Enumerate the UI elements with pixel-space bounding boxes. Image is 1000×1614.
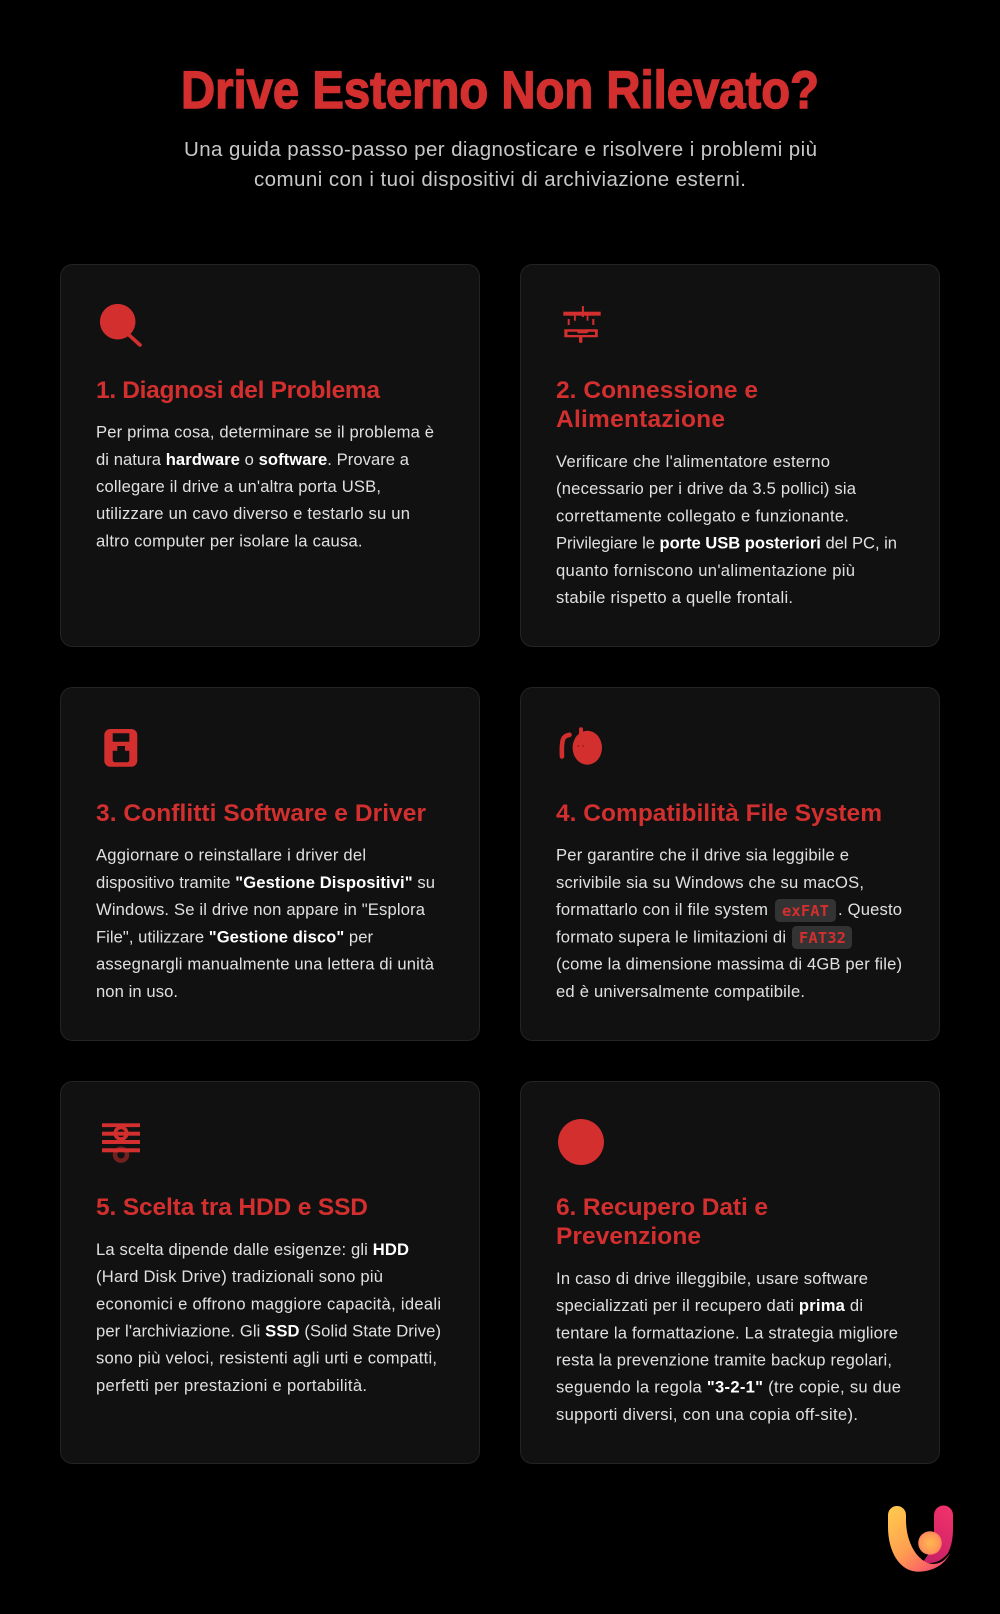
logo [888,1506,953,1572]
text: card 5: per l'archiviazione. Gli SSD (Solid State Drive) [96,1322,441,1341]
text: card 6: tentare la formattazione. La strategia migliore [556,1323,898,1342]
heading: card 5: 5. Scelta tra HDD e SSD [96,1194,368,1221]
icon: solid circle [558,1119,604,1165]
heading: card 2 [556,377,758,433]
code: FAT32 [792,926,852,949]
heading: card 3: 3. Conflitti Software e Driver [96,800,426,827]
text: card 2: (necessario per i drive da 3.5 pollici) sia [556,479,857,498]
text: card 1: Per prima cosa, determinare se il problema è [96,423,434,442]
heading: card 1: 1. Diagnosi del Problema [96,377,380,404]
text: card 4: Per garantire che il drive sia leggibile e [556,846,849,865]
text: card 2 [556,452,897,607]
text: card 3: File", utilizzare "Gestione disco" per [96,927,373,946]
icon: apple and windows blob [562,727,602,765]
text: card 6 [556,1269,901,1424]
text: card 3: Windows. Se il drive non appare in "Esplora [96,900,426,919]
icon: drive stack [102,1123,140,1161]
panel: 3. conflitti software e driver [60,688,480,1040]
text: card 5 [96,1240,441,1395]
heading: card 4: 4. Compatibilità File System [556,800,882,827]
text: card 1: di natura hardware o software. Provare a [96,450,410,469]
panel: 5. scelta tra hdd e ssd [60,1082,480,1464]
panel: 6. recupero dati e prevenzione [520,1082,940,1464]
text: card 1: collegare il drive a un'altra porta USB, [96,477,381,496]
text: card 5: La scelta dipende dalle esigenze: gli HDD [96,1240,409,1259]
text: card 6: specializzati per il recupero dati prima di [556,1296,863,1315]
code: exFAT [775,899,836,922]
code: FAT32: FAT32 [799,929,846,947]
text: card 3: non in uso. [96,982,178,1001]
icon: magnifying glass [100,304,140,345]
text: card 2: quanto forniscono un'alimentazione più [556,561,855,580]
title: Drive Esterno Non Rilevato? [181,61,819,120]
text: card 6: supporti diversi, con una copia off-site). [556,1405,858,1424]
text: card 5: (Hard Disk Drive) tradizionali sono più [96,1267,383,1286]
text: card 1: utilizzare un cavo diverso e testarlo su un [96,504,410,523]
text: card 3: Aggiornare o reinstallare i driver del [96,846,366,865]
header [181,61,819,191]
heading: card 6 [556,1194,768,1250]
heading: card 2: Alimentazione [556,406,725,433]
text: card 5: perfetti per prestazioni e portabilità. [96,1376,367,1395]
heading: card 2: 2. Connessione e [556,377,758,404]
text: card 4 [556,846,902,1001]
subtitle: comuni con i tuoi dispositivi di archiviazione esterni. [254,168,746,191]
text: card 4: formato supera le limitazioni di [556,927,786,946]
text: card 2: Verificare che l'alimentatore esterno [556,452,830,471]
panel: 1. diagnosi del problema [60,264,480,646]
heading: card 6: Prevenzione [556,1223,701,1250]
heading: card 6: 6. Recupero Dati e [556,1194,768,1221]
text: card 4: scrivibile sia su Windows che su macOS, [556,873,864,892]
text: card 3: dispositivo tramite "Gestione Dispositivi" su [96,873,435,892]
text: card 4: formattarlo con il file system [556,900,768,919]
text: card 3: assegnargli manualmente una lettera di unità [96,955,435,974]
text: card 2: correttamente collegato e funzionante. [556,506,849,525]
text: card 6: In caso di drive illeggibile, usare software [556,1269,868,1288]
text: card 1 [96,423,434,550]
text: card 5: economici e offrono maggiore capacità, ideali [96,1294,441,1313]
text: card 6: resta la prevenzione tramite backup regolari, [556,1351,892,1370]
text: card 4: (come la dimensione massima di 4GB per file) [556,955,902,974]
icon: floppy disk [104,729,137,767]
panel: 4. compatibilita file system [520,688,940,1040]
panel: 2. connessione e alimentazione [520,264,940,646]
text: card 3 [96,846,435,1001]
subtitle: Una guida passo-passo per diagnosticare e risolvere i problemi più [184,138,817,161]
subtitle [184,138,817,191]
code: exFAT: exFAT [782,902,829,920]
text: card 4: ed è universalmente compatibile. [556,982,805,1001]
text: card 4: . Questo [838,900,902,919]
text: card 5: sono più veloci, resistenti agli urti e compatti, [96,1349,437,1368]
text: card 1: altro computer per isolare la causa. [96,531,362,550]
icon: power connector [563,306,601,343]
text: card 2: stabile rispetto a quelle frontali. [556,588,793,607]
text: card 2: Privilegiare le porte USB posteriori del PC, in [556,534,897,553]
text: card 6: seguendo la regola "3-2-1" (tre copie, su due [556,1378,901,1397]
